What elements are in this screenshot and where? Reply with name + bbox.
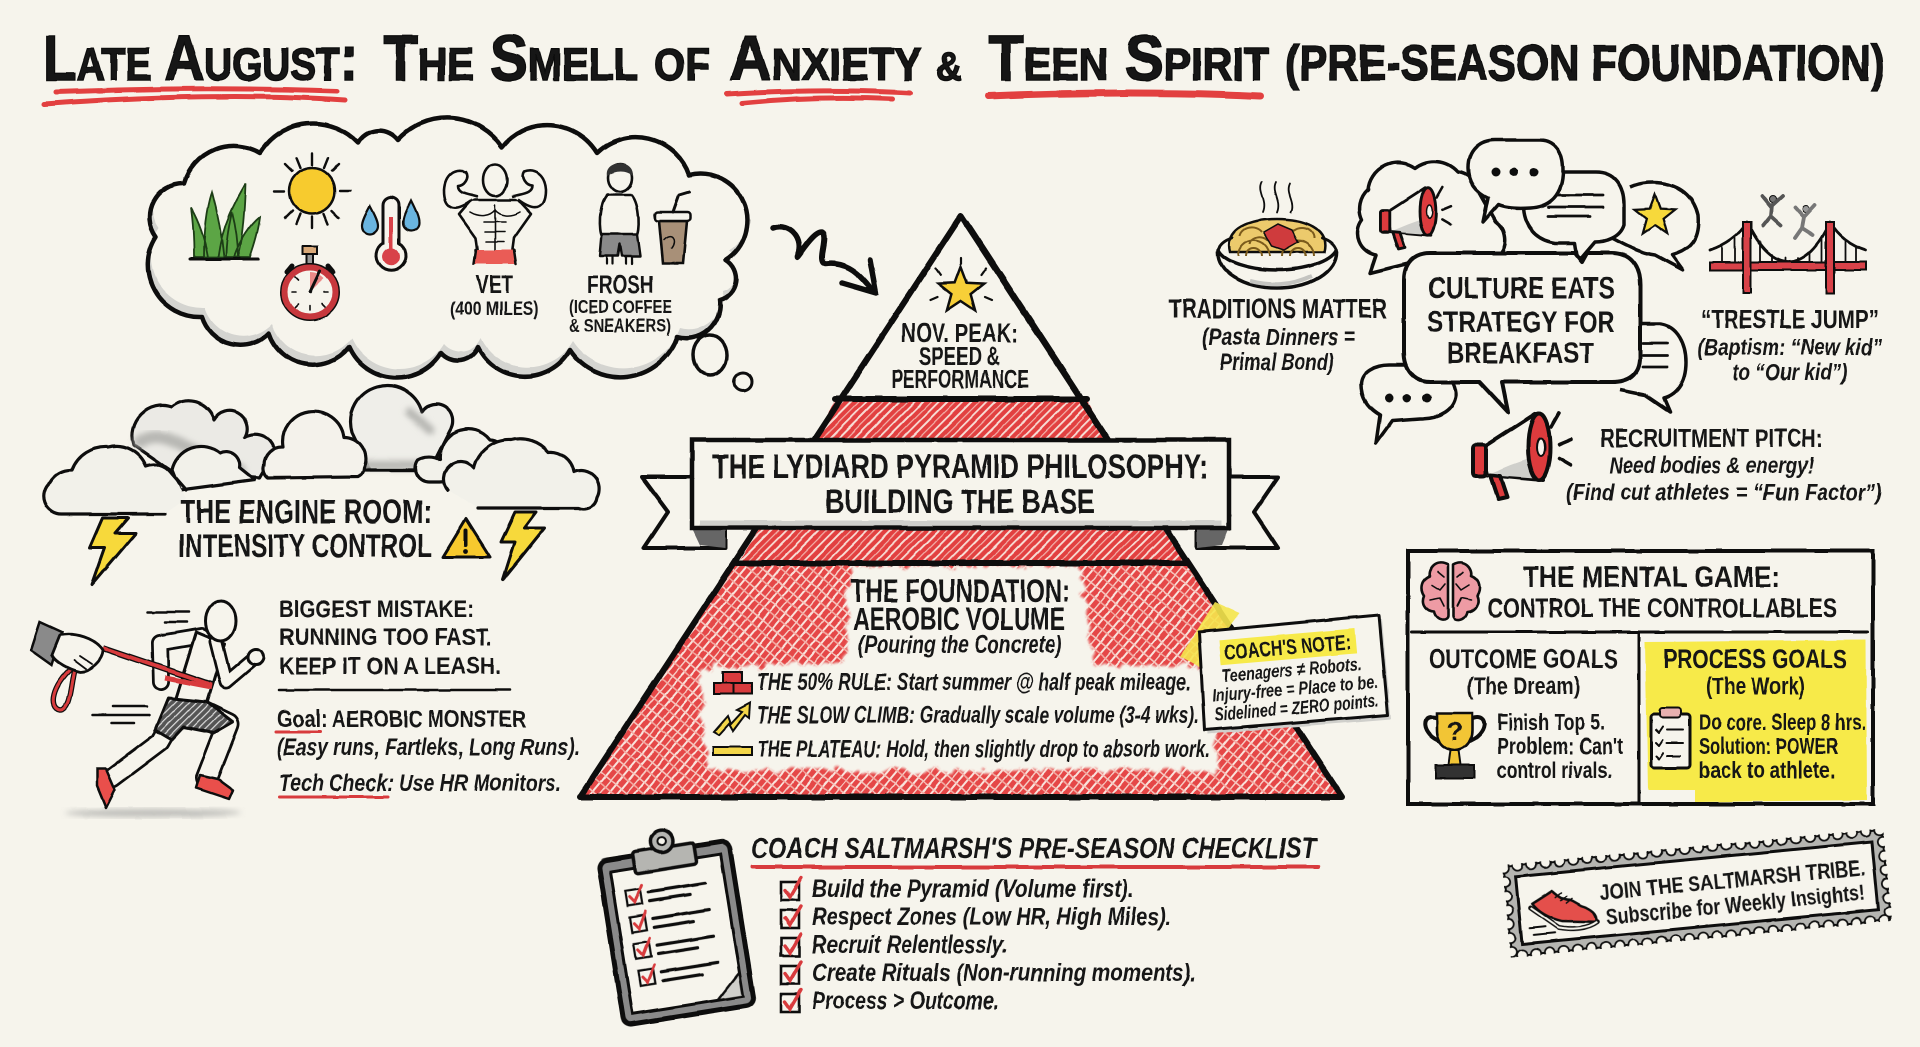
column: outcome goals: control rivals. <box>1497 757 1612 783</box>
column: process goals: Do core. Sleep 8 hrs. <box>1699 709 1866 735</box>
foundation heading: (Pouring the Concrete) <box>858 631 1062 659</box>
column: outcome goals: OUTCOME GOALS <box>1429 644 1618 674</box>
text: goal and tech check: (Easy runs, Fartleks, Long Runs). <box>277 734 580 761</box>
foundation heading: AEROBIC VOLUME <box>853 601 1065 637</box>
label: vet <box>450 271 539 320</box>
icon: runner on leash <box>31 601 264 817</box>
text: trestle jump: “TRESTLE JUMP” <box>1701 304 1879 334</box>
icon: running shoe <box>1526 887 1598 935</box>
thought cloud: pre-season scene <box>148 109 752 391</box>
title: Teen Spirit <box>988 22 1269 94</box>
bubble: dots top <box>1468 140 1563 222</box>
icon: steam <box>1261 182 1292 212</box>
bubble: star <box>1612 182 1698 270</box>
item: plateau <box>713 736 1210 763</box>
main bubble: culture eats strategy: STRATEGY FOR <box>1427 306 1615 339</box>
column: process goals: Solution: POWER <box>1699 733 1838 759</box>
column: outcome goals <box>1425 644 1623 783</box>
main bubble: culture eats strategy <box>1404 253 1640 412</box>
icon: jumpers <box>1762 196 1815 238</box>
icon: freshman runner <box>600 163 640 264</box>
bubble: lines right <box>1620 324 1686 412</box>
icon: lightning right <box>501 512 545 580</box>
pyramid <box>580 216 1342 797</box>
column: process goals: back to athlete. <box>1699 757 1835 783</box>
icon: pasta bowl <box>1218 219 1336 288</box>
label: frosh: & SNEAKERS) <box>569 316 671 336</box>
text: goal and tech check: Tech Check: Use HR Monitors. <box>279 770 561 797</box>
icon: sun <box>274 153 350 228</box>
icon: clipboard large <box>595 820 755 1025</box>
speech bubbles <box>1358 140 1698 443</box>
checklist items: Build the Pyramid (Volume first). <box>812 875 1134 903</box>
foundation heading: THE FOUNDATION: <box>851 573 1070 609</box>
peak label: PERFORMANCE <box>891 364 1029 394</box>
label: frosh: FROSH <box>587 271 654 299</box>
heading: mental game: CONTROL THE CONTROLLABLES <box>1488 593 1837 623</box>
banner: Lydiard pyramid philosophy: BUILDING THE BASE <box>825 483 1095 521</box>
label: frosh: (ICED COFFEE <box>569 297 672 317</box>
checklist items: Respect Zones (Low HR, High Miles). <box>812 903 1171 931</box>
text: trestle jump <box>1698 304 1882 385</box>
stamp: join the tribe: Subscribe for Weekly Insights! <box>1605 880 1866 930</box>
icon: stopwatch <box>281 246 339 320</box>
text: recruitment pitch <box>1566 423 1882 505</box>
item: slow climb: THE SLOW CLIMB: Gradually scale volume (3-4 wks). <box>757 702 1199 729</box>
heading: engine room: INTENSITY CONTROL <box>178 527 432 564</box>
label: frosh <box>569 271 672 336</box>
pyramid middle band <box>738 400 1186 563</box>
peak label <box>891 318 1029 394</box>
icon: thermometer with sweat drops <box>362 197 419 271</box>
column: process goals: PROCESS GOALS <box>1663 644 1847 674</box>
storm clouds <box>43 386 599 514</box>
callout: coach's note: COACH'S NOTE: <box>1223 631 1352 665</box>
text: goal and tech check: Goal: AEROBIC MONSTER <box>277 706 526 733</box>
checklist items: Process > Outcome. <box>812 987 999 1015</box>
pyramid foundation <box>580 216 1342 797</box>
checklist items <box>781 875 1196 1015</box>
label: vet: (400 MILES) <box>450 299 539 320</box>
icon: trophy <box>1425 713 1484 778</box>
text: traditions matter <box>1169 293 1387 376</box>
title: Late August: <box>43 22 358 94</box>
text: traditions matter: (Pasta Dinners = <box>1202 324 1355 351</box>
heading: engine room <box>178 493 432 564</box>
main bubble: culture eats strategy: CULTURE EATS <box>1428 272 1615 305</box>
stamp: join the tribe: JOIN THE SALTMARSH TRIBE. <box>1598 855 1867 905</box>
text: recruitment pitch: Need bodies & energy! <box>1609 452 1814 478</box>
icon: trestle bridge <box>1710 222 1866 293</box>
banner: Lydiard pyramid philosophy <box>642 440 1278 548</box>
icon: megaphone <box>1473 413 1571 499</box>
item: slow climb <box>714 702 1199 735</box>
panel: culture <box>1169 140 1882 505</box>
peak label: NOV. PEAK: <box>901 318 1018 348</box>
icon: clipboard <box>1651 708 1690 768</box>
text: recruitment pitch: RECRUITMENT PITCH: <box>1600 423 1823 453</box>
column: outcome goals: Problem: Can't <box>1497 733 1623 759</box>
callout: coach's note: Injury-free = Place to be. <box>1211 671 1379 706</box>
text: traditions matter: Primal Bond) <box>1220 349 1334 376</box>
pyramid peak <box>837 218 1085 398</box>
peak label: SPEED & <box>919 341 1000 371</box>
callout: coach's note: Teenagers ≠ Robots. <box>1221 653 1362 686</box>
heading: mental game <box>1488 561 1837 623</box>
column: process goals: (The Work) <box>1706 673 1805 700</box>
text: biggest mistake <box>279 596 510 690</box>
text: trestle jump: to “Our kid”) <box>1732 359 1848 385</box>
icon: brain <box>1422 563 1479 620</box>
title <box>43 22 1885 104</box>
title: & <box>936 45 962 89</box>
icon: warning <box>443 519 490 557</box>
icon: star <box>930 258 992 310</box>
icon: trophy: ? <box>1447 716 1463 746</box>
bubble: megaphone cloud <box>1358 162 1505 273</box>
foundation heading <box>851 573 1070 659</box>
bubble: lines <box>1523 172 1624 262</box>
checklist items: Recruit Relentlessly. <box>812 931 1008 959</box>
icon: grass <box>190 183 260 259</box>
column: outcome goals: Finish Top 5. <box>1497 709 1605 735</box>
text: trestle jump: (Baptism: “New kid” <box>1698 334 1882 360</box>
main bubble: culture eats strategy: BREAKFAST <box>1447 337 1594 370</box>
column: outcome goals: (The Dream) <box>1467 673 1580 700</box>
column: process goals <box>1651 644 1866 783</box>
callout: coach's note: Sidelined = ZERO points. <box>1213 690 1380 725</box>
item: 50% rule: THE 50% RULE: Start summer @ half peak mileage. <box>757 669 1191 696</box>
icon: iced coffee <box>655 192 690 263</box>
heading: checklist: COACH SALTMARSH'S PRE-SEASON CHECKLIST <box>751 833 1318 865</box>
title: The Smell of <box>383 22 710 94</box>
text: biggest mistake: RUNNING TOO FAST. <box>279 624 492 651</box>
panel: checklist <box>595 820 1318 1025</box>
banner: Lydiard pyramid philosophy: THE LYDIARD PYRAMID PHILOSOPHY: <box>712 448 1208 486</box>
heading: mental game: THE MENTAL GAME: <box>1523 561 1780 594</box>
text: traditions matter: TRADITIONS MATTER <box>1169 293 1387 324</box>
callout: coach's note <box>1180 602 1391 734</box>
icon: lightning left <box>90 518 136 585</box>
icon: veteran runner <box>444 164 546 264</box>
item: plateau: THE PLATEAU: Hold, then slightly drop to absorb work. <box>757 736 1210 763</box>
panel: the mental game <box>1408 551 1873 804</box>
thought bubble dots <box>693 335 752 391</box>
heading: engine room: THE ENGINE ROOM: <box>180 493 432 530</box>
text: biggest mistake: KEEP IT ON A LEASH. <box>279 653 501 680</box>
label: vet: VET <box>476 271 513 299</box>
title: Anxiety <box>729 22 922 94</box>
panel: engine room <box>31 386 599 817</box>
checklist items: Create Rituals (Non-running moments). <box>812 959 1196 987</box>
bubble: dots bottom <box>1361 365 1456 443</box>
text: goal and tech check <box>276 706 580 797</box>
text: biggest mistake: BIGGEST MISTAKE: <box>279 596 474 623</box>
item: 50% rule <box>714 669 1191 696</box>
arrow: squiggle to pyramid <box>773 227 876 293</box>
stamp: join the tribe <box>1495 821 1899 965</box>
